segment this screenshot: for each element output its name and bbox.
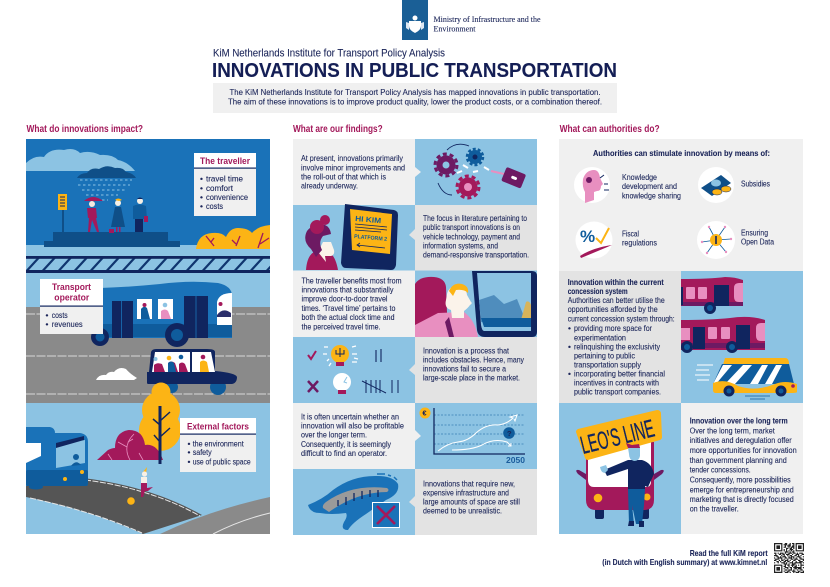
light ground bands <box>26 245 270 307</box>
finding 3 text: the perceived travel time. <box>302 321 380 331</box>
traveller with bag <box>109 198 125 233</box>
light cloud <box>26 149 135 171</box>
open data label: Ensuring <box>741 228 768 238</box>
panel: what do innovations impact <box>26 139 270 534</box>
long term text: more opportunities for innovation <box>690 445 797 455</box>
concession system text: public transport companies. <box>574 387 661 397</box>
finding 4 text <box>423 345 525 383</box>
long term text: marketing that is directly focused <box>690 494 794 504</box>
fiscal label <box>622 228 657 247</box>
yellow ball <box>127 497 135 505</box>
intro text block <box>213 83 617 113</box>
dashed road lines <box>26 314 270 394</box>
finding 1 text: At present, innovations primarily <box>301 153 404 163</box>
panel: what can authorities do <box>559 139 803 534</box>
traveller in coat <box>133 198 148 232</box>
concession system text: experimentation <box>574 332 626 342</box>
dark curved road <box>26 470 202 534</box>
icon: traveller by train window <box>415 271 537 337</box>
long term text: initiatives and deregulation offer <box>690 435 792 445</box>
heading: authorities: What can authorities do? <box>560 124 660 135</box>
finding 3 text: innovations that substantially <box>302 285 394 295</box>
concession system text: transportation supply <box>574 359 642 369</box>
long term text: tender concessions. <box>690 465 751 475</box>
icon: open data <box>697 221 735 259</box>
ministry logo <box>402 0 428 40</box>
bus stop sign <box>58 194 67 232</box>
sky <box>26 139 270 245</box>
footer: report link <box>602 548 768 567</box>
ministry name: Ministry of Infrastructure and the <box>434 14 541 24</box>
finding 2 text: public transport innovations is on <box>423 222 520 232</box>
concession system text: relinquishing the exclusivity <box>574 341 661 351</box>
box: the traveller: comfort <box>206 183 234 193</box>
box: the traveller: costs <box>206 201 223 211</box>
rain <box>78 180 132 200</box>
long term text: Consequently, more possibilities <box>690 475 791 485</box>
long term text: emerge for entrepreneurship and <box>690 484 794 494</box>
intro text block: The aim of these innovations is to improve product quality, lower the product costs, or a combination thereof. <box>228 96 602 106</box>
rain cloud <box>77 166 136 178</box>
box: transport operator: • <box>46 310 48 320</box>
yellow bus <box>695 358 797 399</box>
traveller with umbrella <box>84 197 103 232</box>
long term text <box>690 416 797 514</box>
bus <box>576 442 664 519</box>
heading: impact: What do innovations impact? <box>26 124 143 135</box>
icon: knowledge head <box>574 167 610 203</box>
box: the traveller: The traveller <box>200 156 250 167</box>
box: transport operator: Transport <box>52 282 92 293</box>
railway <box>26 256 270 273</box>
concession system text: • <box>568 369 571 379</box>
concession system text: incorporating better financial <box>574 369 665 379</box>
finding 1 text <box>301 153 405 191</box>
icon: gears and oil can <box>435 144 526 198</box>
destination banner: LEO'S LINE <box>578 415 657 460</box>
concession system text: providing more space for <box>574 323 652 333</box>
knowledge label: development and <box>622 181 677 191</box>
concession system text: • <box>568 323 571 333</box>
concession system text <box>568 277 675 397</box>
icon: woman reading display: PLATFORM 2 <box>354 234 387 243</box>
finding 5 text <box>301 412 404 458</box>
box: external factors: External factors <box>187 422 249 432</box>
icon: subsidies <box>698 167 734 203</box>
finding 3 text <box>302 276 402 331</box>
finding 3 text: times. ‘Travel time’ pertains to <box>302 303 396 313</box>
car <box>147 349 237 395</box>
footer: report link: (in Dutch with English summary) at www.kimnet.nl <box>602 557 767 567</box>
box: the traveller: • <box>200 192 203 202</box>
concession system text: opportunities afforded by the <box>568 304 658 314</box>
finding 1 text: the roll-out of that which is <box>301 171 386 181</box>
concession system text: current concession system through: <box>568 313 675 323</box>
icon: fiscal regulations <box>576 222 612 258</box>
ministry name: Environment <box>434 24 476 34</box>
concession system text: pertaining to public <box>574 350 635 360</box>
box: the traveller: • <box>200 183 203 193</box>
exhaust cloud <box>96 368 137 380</box>
road background <box>26 307 270 403</box>
box: the traveller: travel time <box>206 174 243 184</box>
box: external factors: • <box>188 438 190 448</box>
finding 5 text: It is often uncertain whether an <box>301 412 399 422</box>
concession system text: concession system <box>568 286 628 296</box>
finding 2 text: The focus in literature pertaining to <box>423 213 527 223</box>
grey road <box>160 497 270 534</box>
box: external factors: safety <box>193 447 212 457</box>
footer: report link: Read the full KiM report <box>690 548 768 558</box>
chart: uncertain profit to 2050: 2050 <box>506 456 526 465</box>
lower landscape <box>26 403 270 534</box>
finding 2 text: information systems, and <box>423 240 498 250</box>
finding 1 text: already underway. <box>301 181 358 191</box>
box: the traveller: • <box>200 174 203 184</box>
box: external factors <box>180 418 256 472</box>
finding 5 text: over the longer term. <box>301 430 367 440</box>
subsidies label: Subsidies <box>741 178 770 188</box>
finding 6 text <box>423 479 520 516</box>
finding 5 text: difficult to find an operator. <box>301 448 387 458</box>
finding 6 text: expensive infrastructure and <box>423 488 509 498</box>
chart: uncertain profit to 2050 <box>420 408 526 465</box>
knowledge label: Knowledge <box>622 172 657 182</box>
knowledge label <box>622 172 681 201</box>
chart: uncertain profit to 2050: € <box>422 410 426 418</box>
long term text: Innovation over the long term <box>690 416 788 426</box>
open data label <box>741 228 774 247</box>
box: transport operator: revenues <box>52 319 83 329</box>
box: the traveller: convenience <box>206 192 248 202</box>
box: transport operator <box>40 279 103 334</box>
Leo's Line illustration <box>576 410 664 527</box>
finding 4 text: large-scale place in the market. <box>423 373 520 383</box>
running child <box>141 467 153 497</box>
yellow tree <box>139 382 181 464</box>
long term text: Over the long term, market <box>690 425 775 435</box>
backgrounds <box>559 139 803 534</box>
pink bus upper <box>681 277 743 314</box>
finding 5 text: innovation will also be profitable <box>301 421 404 431</box>
pink bush <box>97 406 163 464</box>
box: external factors: • <box>188 456 190 466</box>
icon: fiscal regulations: % <box>580 227 595 246</box>
concession system text: Authorities can better utilise the <box>568 295 665 305</box>
finding 6 text: deemed to be unrealistic. <box>423 506 502 516</box>
finding 4 text: includes obstacles. Hence, many <box>423 355 525 365</box>
intro text block: The KiM Netherlands Institute for Transport Policy Analysis has mapped innovations in public transportation. <box>230 87 600 97</box>
finding 6 text: Innovations that require new, <box>423 479 515 489</box>
concession system text: • <box>568 341 571 351</box>
finding 2 text <box>423 213 529 259</box>
yellow bush <box>196 225 270 249</box>
icon: lightbulbs, checks and tallies <box>308 345 398 394</box>
box: external factors: the environment <box>193 438 244 448</box>
chart: uncertain profit to 2050: ? <box>507 429 512 438</box>
icon: woman reading display <box>305 204 398 270</box>
icon: unrealistic infrastructure <box>308 474 400 530</box>
man <box>600 443 654 527</box>
box: transport operator: operator <box>54 292 90 304</box>
finding 5 text: Consequently, it is seemingly <box>301 439 392 449</box>
pink bus lower <box>681 317 765 353</box>
fiscal label: Fiscal <box>622 228 639 238</box>
knowledge label: knowledge sharing <box>622 191 681 201</box>
ministry name <box>434 14 541 34</box>
QR code <box>774 544 804 572</box>
box: transport operator: • <box>46 319 48 329</box>
finding 2 text: demand-responsive transportation. <box>423 249 529 259</box>
large bus <box>91 282 232 347</box>
concession system text: incentives in contracts with <box>574 378 659 388</box>
row backgrounds <box>293 139 537 535</box>
box: external factors: • <box>188 447 190 457</box>
finding 1 text: involve minor improvements and <box>301 162 405 172</box>
box: the traveller <box>194 153 256 216</box>
finding 6 text: large amounts of space are still <box>423 497 520 507</box>
heading: findings: What are our findings? <box>293 124 383 135</box>
icon: woman reading display: HI KIM <box>355 214 382 225</box>
concession system text: Innovation within the current <box>568 277 664 287</box>
finding 4 text: Innovation is a process that <box>423 345 510 355</box>
finding 4 text: innovations fail to secure a <box>423 364 506 374</box>
box: external factors: use of public space <box>193 456 251 466</box>
finding 3 text: improve door-to-door travel <box>302 294 388 304</box>
box: the traveller: • <box>200 201 203 211</box>
subtitle: KiM Netherlands Institute for Transport Policy Analysis <box>213 48 445 60</box>
means heading: Authorities can stimulate innovation by means of: <box>593 148 770 158</box>
long term text: than government planning and <box>690 455 787 465</box>
title: INNOVATIONS IN PUBLIC TRANSPORTATION <box>212 59 617 82</box>
bus front <box>26 427 88 490</box>
finding 2 text: vehicle technology, payment and <box>423 231 520 241</box>
finding 3 text: The traveller benefits most from <box>302 276 402 286</box>
box: transport operator: costs <box>52 310 68 320</box>
platform <box>44 232 180 247</box>
long term text: on the traveller. <box>690 504 739 514</box>
panel: what are our findings <box>293 139 537 535</box>
open data label: Open Data <box>741 237 774 247</box>
finding 3 text: both the actual clock time and <box>302 312 395 322</box>
fiscal label: regulations <box>622 237 657 247</box>
